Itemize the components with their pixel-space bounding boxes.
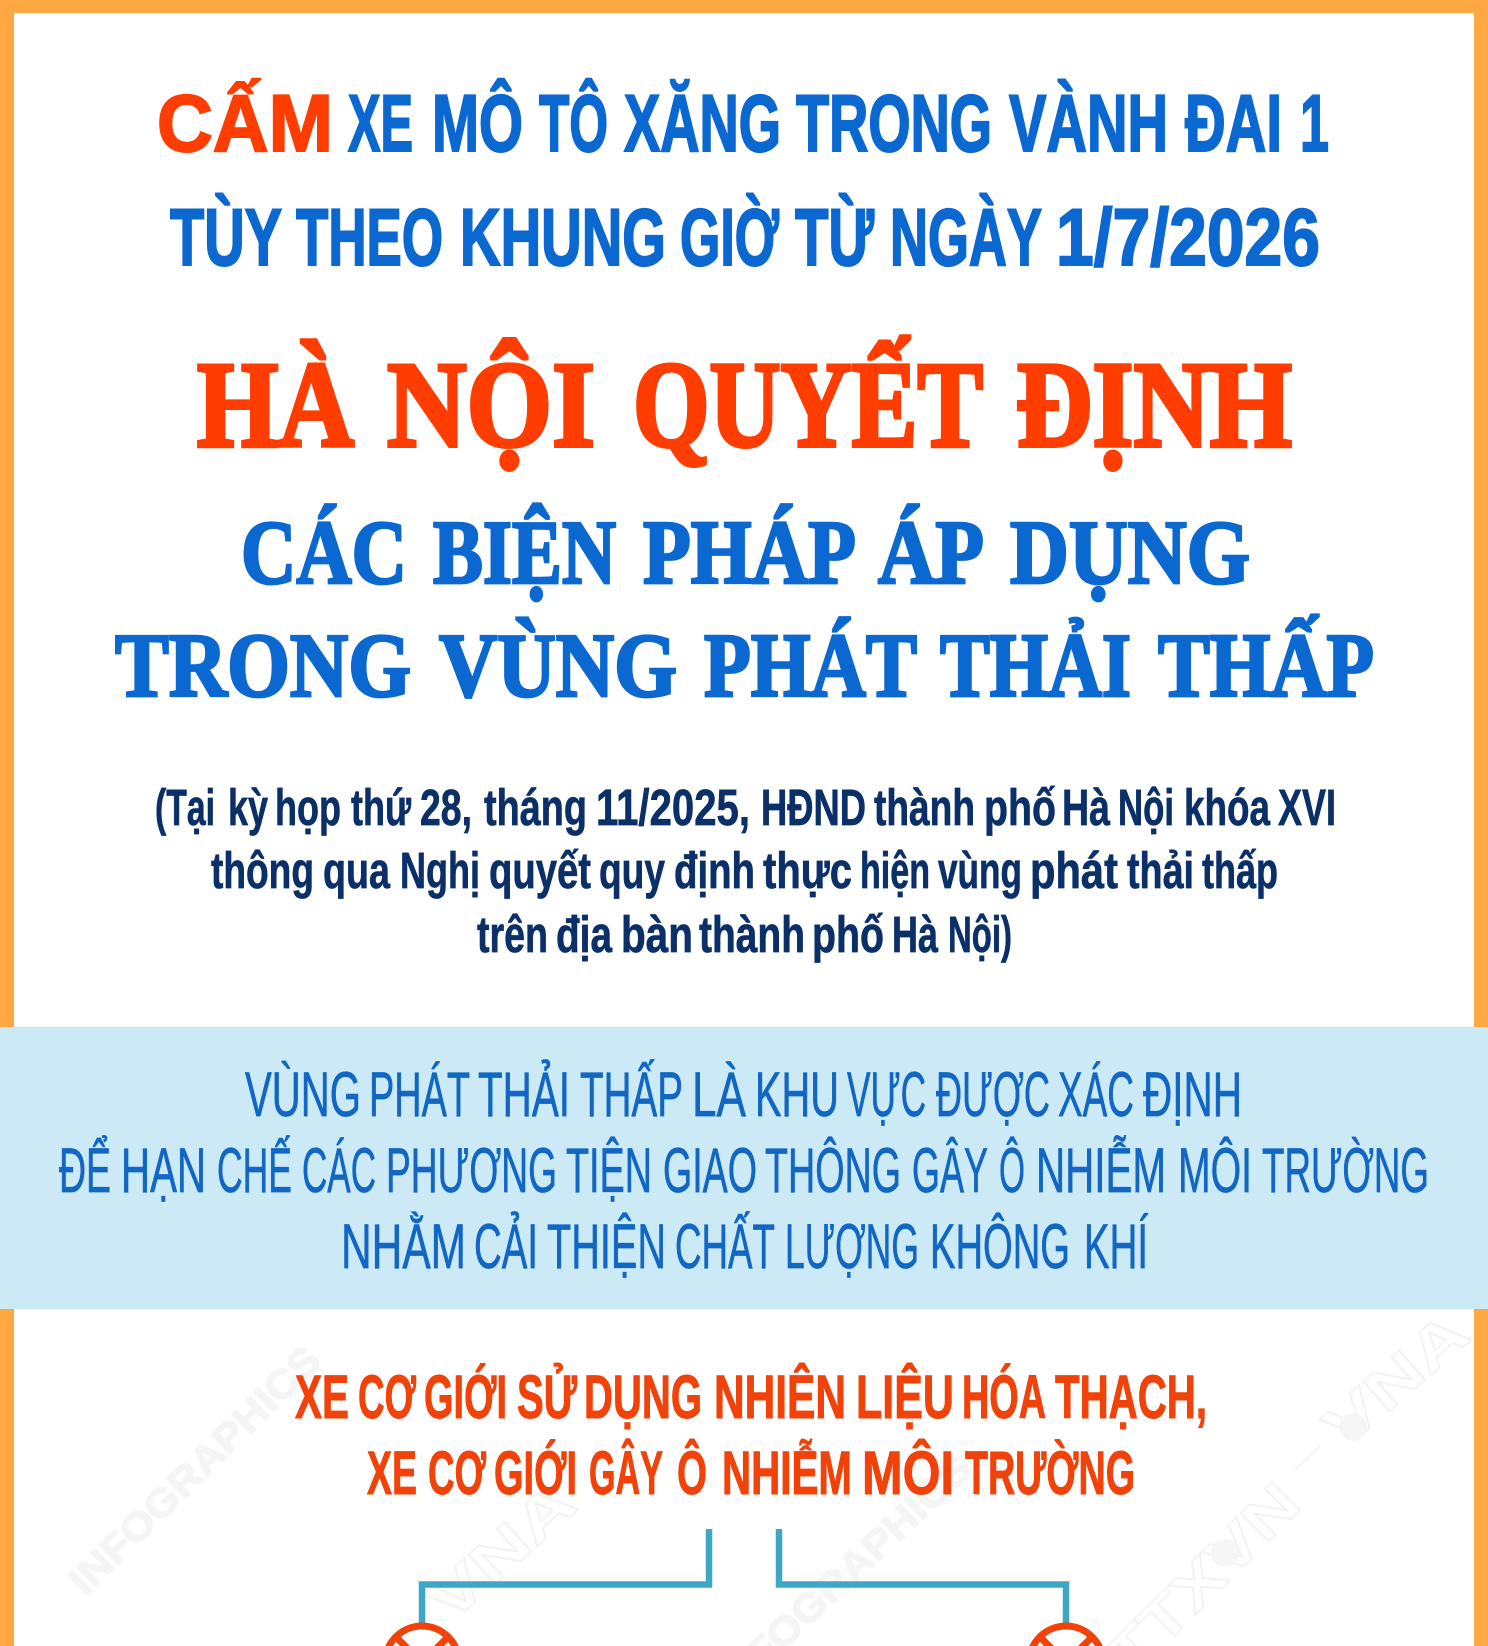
text block: resolution note: XVI (1278, 779, 1336, 836)
text block: resolution note: phố (984, 779, 1056, 836)
heading: measures in low emission zone: BIỆN (433, 502, 616, 603)
definition text: NHIỄM (1036, 1135, 1166, 1206)
text block: resolution note: 11/2025, (596, 779, 750, 836)
heading: restricted vehicles: XE (295, 1363, 349, 1431)
title: motorbike ban: TÙY (170, 192, 282, 283)
text block: resolution note: hiện (860, 842, 930, 899)
heading: Hanoi decision (197, 336, 1292, 473)
definition text: PHƯƠNG (386, 1136, 557, 1206)
heading: restricted vehicles: TRƯỜNG (965, 1439, 1135, 1507)
heading: Hanoi decision: ĐỊNH (1016, 336, 1292, 473)
text block: resolution note: địa (556, 906, 612, 963)
text block: resolution note: Hà (1062, 779, 1110, 836)
text block: resolution note: bàn (621, 906, 693, 963)
heading: restricted vehicles: LIỆU (856, 1363, 954, 1431)
definition text: KHÍ (1084, 1212, 1148, 1282)
heading: measures in low emission zone: CÁC (241, 502, 407, 603)
title: motorbike ban: XE (348, 79, 413, 169)
definition text: ĐỂ (59, 1135, 111, 1206)
definition text: GÂY (912, 1136, 988, 1206)
title: motorbike ban: XĂNG (624, 79, 781, 169)
text block: resolution note: quyết (489, 842, 591, 899)
definition text: VÙNG (245, 1060, 361, 1130)
text block: resolution note: họp (275, 779, 341, 836)
panel: low emission zone definition (0, 1027, 1488, 1309)
heading: measures in low emission zone: VÙNG (439, 615, 677, 716)
definition text: THÔNG (765, 1136, 901, 1206)
heading: restricted vehicles: SỬ (517, 1363, 577, 1431)
definition text: CẢI (474, 1211, 538, 1282)
heading: Hanoi decision: HÀ (197, 336, 354, 473)
title: motorbike ban: NGÀY (890, 193, 1042, 283)
definition text: CHẾ (217, 1135, 292, 1206)
icon: left prohibition sign (385, 1626, 459, 1646)
definition text: LÀ (692, 1060, 746, 1130)
text block: resolution note: khóa (1184, 779, 1270, 836)
title: motorbike ban: CẤM (157, 78, 333, 169)
text block: resolution note: thứ (351, 779, 411, 836)
heading: restricted vehicles: THẠCH, (1055, 1363, 1207, 1431)
definition text: HẠN (121, 1136, 206, 1206)
text block: resolution note: qua (323, 842, 390, 899)
watermark: VNA (1311, 1299, 1482, 1460)
heading: restricted vehicles: MÔI (862, 1439, 954, 1507)
definition text: THẢI (478, 1059, 570, 1130)
text block: resolution note: Nội) (948, 906, 1012, 963)
heading: restricted vehicles: NHIÊN (714, 1363, 846, 1431)
definition text: VỰC (847, 1060, 926, 1130)
title: motorbike ban: ĐAI (1185, 79, 1282, 169)
heading: measures in low emission zone: PHÁT (704, 615, 917, 716)
definition text: NHẰM (341, 1211, 466, 1282)
title: motorbike ban: TỪ (795, 192, 875, 283)
definition text (59, 1059, 1429, 1282)
title: motorbike ban: TÔ (539, 78, 608, 169)
watermark: INFOGRAPHICS (60, 1338, 330, 1603)
text block: resolution note: thành (874, 779, 975, 836)
heading: restricted vehicles: CƠ (428, 1439, 486, 1507)
title: motorbike ban: TRONG (796, 79, 992, 169)
heading: restricted vehicles (295, 1363, 1207, 1507)
text block: resolution note: Nghị (400, 842, 480, 899)
heading: measures in low emission zone: ÁP (878, 502, 984, 603)
definition text: Ô (999, 1136, 1025, 1206)
text block: resolution note: thực (763, 842, 852, 899)
definition text: TIỆN (566, 1136, 652, 1206)
title: motorbike ban: KHUNG (460, 193, 666, 283)
text block: resolution note: quy (599, 842, 665, 899)
text block: resolution note: HĐND (761, 779, 866, 836)
connector arrows (422, 1529, 1066, 1624)
text block: resolution note: (Tại (155, 779, 215, 836)
definition text: PHÁT (369, 1060, 470, 1130)
title: motorbike ban: GIỜ (680, 192, 779, 283)
definition text: CÁC (302, 1136, 376, 1206)
title: motorbike ban: 1 (1300, 79, 1329, 169)
heading: restricted vehicles: CƠ (358, 1363, 416, 1431)
icon: right prohibition sign (1029, 1626, 1103, 1646)
watermark: VNA (415, 1469, 589, 1635)
heading: Hanoi decision: NỘI (387, 336, 595, 473)
text block: resolution note: kỳ (228, 779, 268, 836)
watermark (60, 1299, 1482, 1646)
text block: resolution note: thải (1127, 842, 1194, 899)
definition text: MÔI (1178, 1136, 1252, 1206)
definition text: THIỆN (547, 1212, 666, 1282)
text block: resolution note (155, 779, 1336, 963)
text block: resolution note: thông (211, 842, 314, 899)
text block: resolution note: Hà (892, 906, 938, 963)
heading: restricted vehicles: Ô (677, 1439, 707, 1507)
heading: measures in low emission zone: THẢI (940, 615, 1131, 716)
text block: resolution note: phố (812, 906, 884, 963)
heading: restricted vehicles: XE (367, 1439, 417, 1507)
definition text: ĐƯỢC (936, 1060, 1050, 1130)
definition text: KHU (755, 1060, 839, 1130)
title: motorbike ban: MÔ (432, 78, 523, 169)
heading: restricted vehicles: NHIỄM (722, 1439, 852, 1507)
text block: resolution note: vùng (938, 842, 1022, 899)
text block: resolution note: trên (477, 906, 548, 963)
title: motorbike ban: 1/7/2026 (1056, 193, 1320, 283)
title: motorbike ban: THEO (296, 193, 443, 283)
heading: measures in low emission zone (115, 502, 1374, 716)
definition text: GIAO (663, 1136, 757, 1206)
definition text: THẤP (580, 1059, 683, 1130)
heading: restricted vehicles: HÓA (962, 1363, 1046, 1431)
text block: resolution note: Nội (1118, 779, 1174, 836)
text block: resolution note: phát (1030, 842, 1118, 899)
definition text: ĐỊNH (1143, 1060, 1242, 1130)
title: motorbike ban: VÀNH (1009, 79, 1168, 169)
heading: measures in low emission zone: TRONG (115, 615, 411, 716)
heading: measures in low emission zone: DỤNG (1010, 502, 1250, 603)
heading: restricted vehicles: GÂY (589, 1439, 663, 1507)
heading: measures in low emission zone: THẤP (1158, 615, 1374, 716)
heading: Hanoi decision: QUYẾT (633, 336, 983, 473)
heading: restricted vehicles: GIỚI (424, 1363, 507, 1431)
heading: restricted vehicles: DỤNG (584, 1363, 702, 1431)
definition text: CHẤT (675, 1211, 775, 1282)
text block: resolution note: thấp (1202, 842, 1278, 899)
text block: resolution note: thành (699, 906, 805, 963)
text block: resolution note: định (674, 842, 755, 899)
text block: resolution note: tháng (484, 779, 587, 836)
text block: resolution note: 28, (420, 779, 472, 836)
definition text: LƯỢNG (785, 1212, 919, 1282)
heading: restricted vehicles: GIỚI (494, 1439, 577, 1507)
definition text: XÁC (1058, 1060, 1134, 1130)
title: motorbike ban (157, 78, 1329, 283)
heading: measures in low emission zone: PHÁP (643, 502, 856, 603)
definition text: KHÔNG (930, 1212, 1070, 1282)
